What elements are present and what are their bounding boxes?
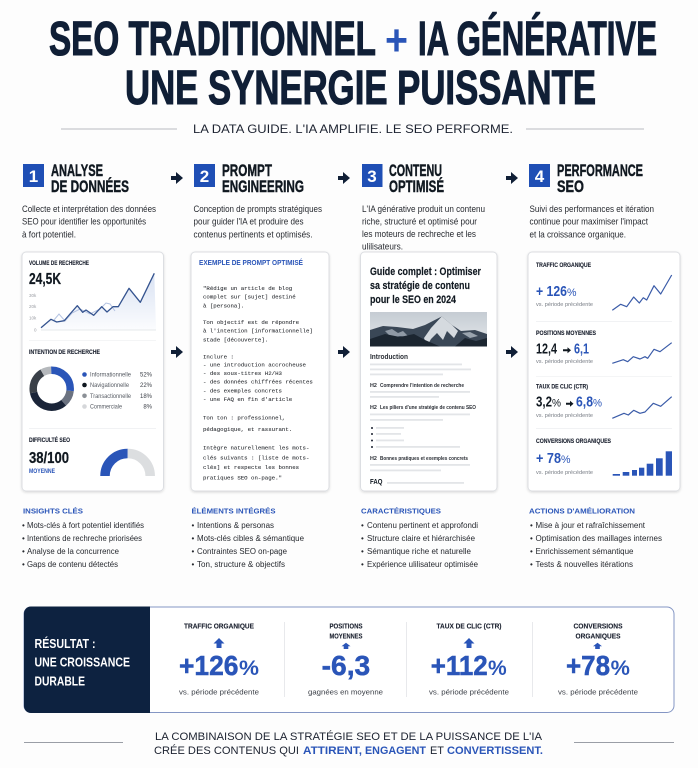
step 4 description: et la croissance organique. [530, 230, 626, 240]
line chart: 10k [29, 316, 37, 320]
list: integrated elements: • [192, 547, 194, 556]
bar chart [613, 451, 672, 476]
article title: sa stratégie de contenu [370, 280, 470, 292]
donut legend: 8% [143, 404, 153, 410]
article section 3: H2 [370, 456, 377, 462]
metric: positions: 12,4 [536, 340, 557, 357]
prompt text: Inclure : [203, 353, 234, 360]
list: characteristics: Structure claire et hiérarchisée [367, 534, 476, 543]
step 4 description: Suivi des performances et itération [530, 204, 654, 214]
kpi: conversions: vs. période précédente [558, 687, 638, 696]
list: integrated elements: Ton, structure & objectifs [197, 560, 285, 569]
step 2 heading: ENGINEERING [222, 177, 304, 196]
list: improvement actions: ACTIONS D'AMÉLIORATION [529, 506, 635, 515]
list: characteristics: Expérience ulilisateur optimisée [367, 560, 479, 569]
prompt text: Intègre naturellement les mots- [203, 444, 309, 451]
donut legend: Transactionnelle [90, 394, 132, 400]
metric: traffic: TRAFFIC ORGANIQUE [536, 262, 591, 269]
donut chart [33, 370, 70, 407]
arrow: card 3 to 4 [506, 346, 518, 358]
kpi: ctr: +112 [431, 650, 488, 681]
prompt text: - des sous-titres H2/H3 [203, 370, 282, 377]
line chart: 20k [29, 304, 37, 309]
list: integrated elements: Intentions & personas [197, 521, 274, 530]
kpi: conversions: ORGANIQUES [576, 633, 621, 640]
metric: ctr: % [593, 398, 602, 410]
kpi: positions: gagnées en moyenne [308, 687, 383, 696]
prompt text: à [persona]. [203, 302, 244, 309]
line chart [29, 273, 156, 332]
metric: conversions: CONVERSIONS ORGANIQUES [536, 438, 611, 445]
line chart: 0 [34, 328, 37, 332]
list: insights: • [22, 534, 25, 543]
step 3 heading [362, 161, 444, 196]
list: insights: Gaps de contenu détectés [27, 560, 118, 569]
footer conclusion: CRÉE DES CONTENUS QUI [154, 744, 299, 757]
step 1 heading: DE DONNÉES [51, 177, 129, 196]
metric: conversions: vs. période précédente [536, 470, 593, 476]
difficulty rating: MOYENNE [29, 469, 55, 475]
panel: prompt card [191, 252, 329, 491]
step 3 description: L'IA générative produit un contenu [362, 204, 485, 214]
list: insights: • [22, 547, 25, 556]
step 4 description [530, 204, 654, 240]
step 2 heading [194, 161, 304, 196]
volume value: 24,5K [29, 271, 61, 288]
footer conclusion: ENGAGENT [365, 745, 426, 757]
panel: data card [22, 252, 164, 491]
step 3 description: ulilisateurs. [362, 242, 403, 252]
step 1 description [22, 204, 156, 240]
metric: traffic: % [567, 287, 577, 299]
prompt text: complet sur [sujet] destiné [203, 294, 296, 301]
list: integrated elements: • [192, 534, 194, 543]
list: integrated elements: Mots-clés cibles & sémantique [197, 534, 305, 543]
metric: positions [536, 330, 672, 365]
article title [370, 266, 481, 306]
kpi: ctr: TAUX DE CLIC (CTR) [436, 623, 502, 630]
metric: ctr: 3,2 [536, 394, 552, 411]
list: improvement actions: • [530, 547, 533, 556]
step 3 description [362, 204, 485, 252]
prompt text: - des exemples concrets [203, 387, 282, 394]
list: improvement actions: • [530, 534, 533, 543]
result headline: RÉSULTAT : [34, 636, 96, 651]
article section 1 [370, 383, 470, 398]
article section 1: Comprendre l'intention de recherche [380, 383, 464, 389]
metric: positions: vs. période précédente [536, 359, 593, 365]
result headline [24, 606, 150, 713]
list: integrated elements [192, 506, 305, 569]
list: characteristics: • [361, 521, 364, 530]
gauge [105, 453, 150, 476]
title: SEO TRADITIONNEL [49, 13, 376, 66]
step 1 heading: ANALYSE [51, 161, 103, 180]
metric: ctr: % [552, 398, 561, 410]
footer conclusion: CONVERTISSENT. [447, 745, 543, 757]
metric: ctr: TAUX DE CLIC (CTR) [536, 383, 588, 390]
article section 1: H2 [370, 383, 377, 389]
prompt text: pédagogique, et rassurant. [203, 426, 292, 433]
donut legend: Commerciale [90, 404, 123, 410]
step 4 heading [529, 161, 643, 196]
list: insights: INSIGHTS CLÉS [23, 506, 83, 515]
article title: Guide complet : Optimiser [370, 266, 481, 278]
metric: positions: POSITIONS MOYENNES [536, 330, 596, 337]
kpi: conversions: +78 [566, 650, 610, 681]
intent label: INTENTION DE RECHERCHE [29, 349, 100, 356]
prompt heading: EXEMPLE DE PROMPT OPTIMISÉ [199, 258, 303, 267]
line chart: 30k [29, 293, 37, 298]
step 3 heading: CONTENU [389, 161, 442, 180]
kpi: traffic: vs. période précédente [179, 687, 259, 696]
list: integrated elements: Contraintes SEO on-page [197, 547, 288, 556]
step 2 description: Conception de prompts stratégiques [194, 204, 322, 214]
prompt text: - des données chiffrées récentes [203, 378, 313, 385]
prompt text: stade [découverte]. [203, 336, 268, 343]
article title: pour le SEO en 2024 [370, 294, 457, 306]
metric: conversions: + 78 [536, 450, 561, 467]
difficulty label: DIFFICULTÉ SEO [29, 436, 70, 444]
article section 2: H2 [370, 405, 377, 411]
step 3 heading: 3 [367, 167, 377, 186]
donut legend: 22% [140, 383, 153, 389]
list: characteristics: CARACTÉRISTIQUES [361, 506, 441, 515]
footer conclusion [24, 730, 674, 757]
prompt text [203, 285, 313, 481]
prompt text: pratiques SEO on-page." [203, 474, 282, 481]
title [49, 12, 657, 115]
kpi: conversions: CONVERSIONS [574, 623, 623, 630]
step 1 heading [23, 161, 129, 196]
kpi: positions: POSITIONS [330, 623, 363, 630]
list: improvement actions: • [530, 521, 533, 530]
list: characteristics: Sémantique riche et naturelle [367, 547, 472, 556]
donut legend [82, 372, 153, 410]
kpi: conversions [558, 623, 638, 696]
step 1 description: SEO pour identifier les opportunités [22, 216, 146, 226]
list: characteristics [361, 506, 479, 569]
donut legend: 52% [140, 372, 153, 378]
kpi: traffic: TRAFFIC ORGANIQUE [184, 623, 254, 630]
panel: results [24, 606, 674, 713]
step 4 description: continue pour maximiser l'impact [530, 216, 648, 226]
metric: traffic [536, 262, 672, 310]
difficulty value: 38/100 [29, 450, 69, 467]
step 3 description: les moteurs de rechreche et les [362, 229, 476, 239]
kpi: conversions: % [611, 657, 630, 680]
arrow: step 2 to 3 [338, 172, 350, 184]
step 2 description: pour guider l'IA et produire des [194, 216, 304, 226]
metric: traffic: + 126 [536, 283, 567, 300]
metric: conversions: % [561, 454, 571, 466]
step 2 description: contenus pertinents et optimisés. [194, 230, 312, 240]
step 4 heading: SEO [557, 177, 584, 196]
metric: positions: 6,1 [574, 340, 589, 357]
step 1 heading: 1 [29, 167, 38, 186]
list: improvement actions: Optimisation des maillages internes [536, 534, 662, 543]
kpi: ctr [429, 623, 509, 696]
kpi: traffic [179, 623, 259, 696]
prompt text: Ton objectif est de répondre [203, 319, 300, 326]
result headline: DURABLE [34, 675, 85, 689]
article section 2 [370, 405, 476, 448]
list: insights: Analyse de la concurrence [27, 547, 120, 556]
article faq [370, 477, 464, 486]
step 2 heading: PROMPT [222, 161, 272, 180]
list: improvement actions: • [530, 560, 533, 569]
article intro [370, 352, 471, 375]
list: integrated elements: ÉLÉMENTS INTÉGRÉS [192, 506, 276, 515]
kpi: traffic: +126 [179, 650, 238, 681]
metric: traffic: vs. période précédente [536, 302, 593, 308]
list: improvement actions [529, 506, 662, 569]
volume label: VOLUME DE RECHERCHE [29, 260, 89, 267]
list: insights [22, 506, 144, 569]
list: insights: Intentions de rechreche priorisées [27, 534, 142, 543]
footer conclusion: LA COMBINAISON DE LA STRATÉGIE SEO ET DE LA PUISSANCE DE L'IA [155, 730, 543, 743]
donut legend: Navigationnelle [90, 383, 130, 389]
kpi: positions [308, 623, 383, 696]
arrow: card 2 to 3 [338, 346, 350, 358]
step 2 heading: 2 [200, 167, 209, 186]
prompt text: - une FAQ en fin d'article [203, 396, 293, 403]
metric: ctr: vs. période précédente [536, 413, 593, 419]
prompt text: à l'intention [informationnelle] [203, 328, 313, 335]
result headline: UNE CROISSANCE [34, 656, 130, 670]
metric: conversions [536, 438, 672, 476]
step 4 heading: 4 [535, 167, 545, 186]
step 1 description: Collecte et interprétation des données [22, 204, 156, 214]
article intro: Introduction [370, 352, 408, 361]
prompt text: clés suivants : [liste de mots- [203, 454, 309, 461]
kpi: positions: -6,3 [322, 650, 370, 681]
list: characteristics: • [361, 547, 364, 556]
kpi: traffic: % [239, 657, 259, 680]
panel: performance card [528, 252, 680, 491]
arrow: step 1 to 2 [171, 172, 183, 184]
mountain image [370, 312, 487, 346]
step 1 description: à fort potentiel. [22, 230, 76, 240]
list: integrated elements: • [192, 560, 194, 569]
list: improvement actions: Tests & nouvelles itérations [536, 560, 633, 569]
article section 3: Bonnes pratiques et exemples concrets [380, 456, 468, 462]
footer conclusion: ATTIRENT, [303, 745, 362, 757]
metric: ctr [536, 383, 672, 419]
article section 2: Les piliers d'une stratégie de contenu SEO [380, 405, 476, 411]
step 2 description [194, 204, 322, 240]
list: integrated elements: • [192, 521, 194, 530]
article faq: FAQ [370, 477, 383, 486]
donut legend: Informationnelle [90, 372, 132, 378]
metric: ctr: 6,8 [576, 394, 593, 411]
list: characteristics: • [361, 534, 364, 543]
arrow: step 3 to 4 [506, 172, 518, 184]
list: characteristics: Contenu pertinent et approfondi [367, 521, 478, 530]
arrow: card 1 to 2 [171, 346, 183, 358]
list: insights: • [22, 560, 25, 569]
kpi: ctr: % [488, 657, 507, 680]
prompt text: "Rédige un article de blog [203, 285, 292, 292]
kpi: positions: MOYENNES [330, 633, 363, 640]
list: improvement actions: Enrichissement sémantique [536, 547, 634, 556]
list: characteristics: • [361, 560, 364, 569]
prompt text: Ton ton : professionnel, [203, 415, 285, 422]
footer conclusion: ET [430, 745, 444, 757]
kpi: ctr: vs. période précédente [429, 687, 509, 696]
donut legend: 18% [140, 394, 153, 400]
list: insights: Mots-clés à fort potentiel identifiés [27, 521, 144, 530]
title: + [385, 16, 408, 65]
step 3 heading: OPTIMISÉ [389, 177, 444, 196]
tagline: LA DATA GUIDE. L'IA AMPLIFIE. LE SEO PERFORME. [193, 123, 513, 136]
prompt text: clés] et respecte les bonnes [203, 464, 299, 471]
step 4 heading: PERFORMANCE [557, 161, 643, 180]
article section 3 [370, 456, 470, 471]
prompt text: - une introduction accrocheuse [203, 362, 307, 369]
list: improvement actions: Mise à jour et rafraîchissement [536, 521, 646, 530]
list: insights: • [22, 521, 25, 530]
step 3 description: riche, structuré et optimisé pour [362, 216, 477, 226]
panel: article card [360, 252, 497, 491]
